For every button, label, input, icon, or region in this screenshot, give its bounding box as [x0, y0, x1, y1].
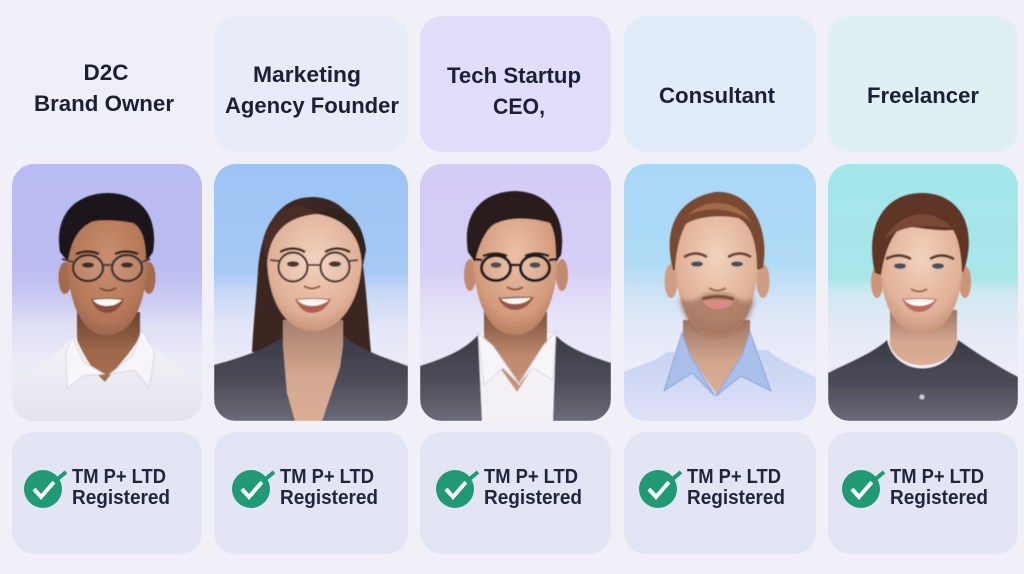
portrait: man with glasses, blazer and white shirt: [420, 164, 611, 421]
badge: TM P+ LTD Registered, column 3: TM P+ LTD: [484, 466, 578, 488]
role card: Marketing Agency Founder: Agency Founder: [225, 93, 399, 118]
badge: TM P+ LTD Registered, column 5: TM P+ LTD: [890, 466, 984, 488]
badge: TM P+ LTD Registered, column 3: [420, 432, 611, 554]
role card: Marketing Agency Founder: Marketing: [253, 62, 361, 87]
badge: TM P+ LTD Registered, column 2: TM P+ LTD: [280, 466, 374, 488]
role card: Tech Startup CEO: Tech Startup: [447, 63, 581, 88]
role card: D2C Brand Owner: Brand Owner: [34, 91, 174, 116]
role card: Marketing Agency Founder: [214, 16, 408, 152]
badge: TM P+ LTD Registered, column 3: Registered: [484, 487, 582, 509]
badge: TM P+ LTD Registered, column 4: TM P+ LTD: [687, 466, 781, 488]
badge: TM P+ LTD Registered, column 4: Registered: [687, 487, 785, 509]
badge: TM P+ LTD Registered, column 1: Registered: [72, 487, 170, 509]
badge: TM P+ LTD Registered, column 5: [828, 432, 1018, 554]
portrait: young man in dark henley: [828, 164, 1018, 421]
badge: TM P+ LTD Registered, column 5: Registered: [890, 487, 988, 509]
role card: Consultant: [624, 16, 816, 152]
portrait: bearded man in light blue shirt: [624, 164, 816, 421]
badge: TM P+ LTD Registered, column 2: Registered: [280, 487, 378, 509]
role card: Tech Startup CEO: [420, 16, 611, 152]
role card: D2C Brand Owner: D2C: [84, 60, 129, 85]
badge: TM P+ LTD Registered, column 1: TM P+ LTD: [72, 466, 166, 488]
role card: Freelancer: Freelancer: [867, 83, 979, 108]
role card: Consultant: Consultant: [659, 83, 776, 108]
badge: TM P+ LTD Registered, column 2: [214, 432, 408, 554]
portrait: woman with glasses and dark blazer: [214, 164, 408, 421]
portrait: man with glasses and white shirt: [12, 164, 202, 421]
role card: Tech Startup CEO: CEO,: [493, 94, 545, 119]
role card: Freelancer: [828, 16, 1018, 152]
badge: TM P+ LTD Registered, column 1: [12, 432, 202, 554]
role card: D2C Brand Owner: [12, 16, 202, 152]
badge: TM P+ LTD Registered, column 4: [624, 432, 816, 554]
